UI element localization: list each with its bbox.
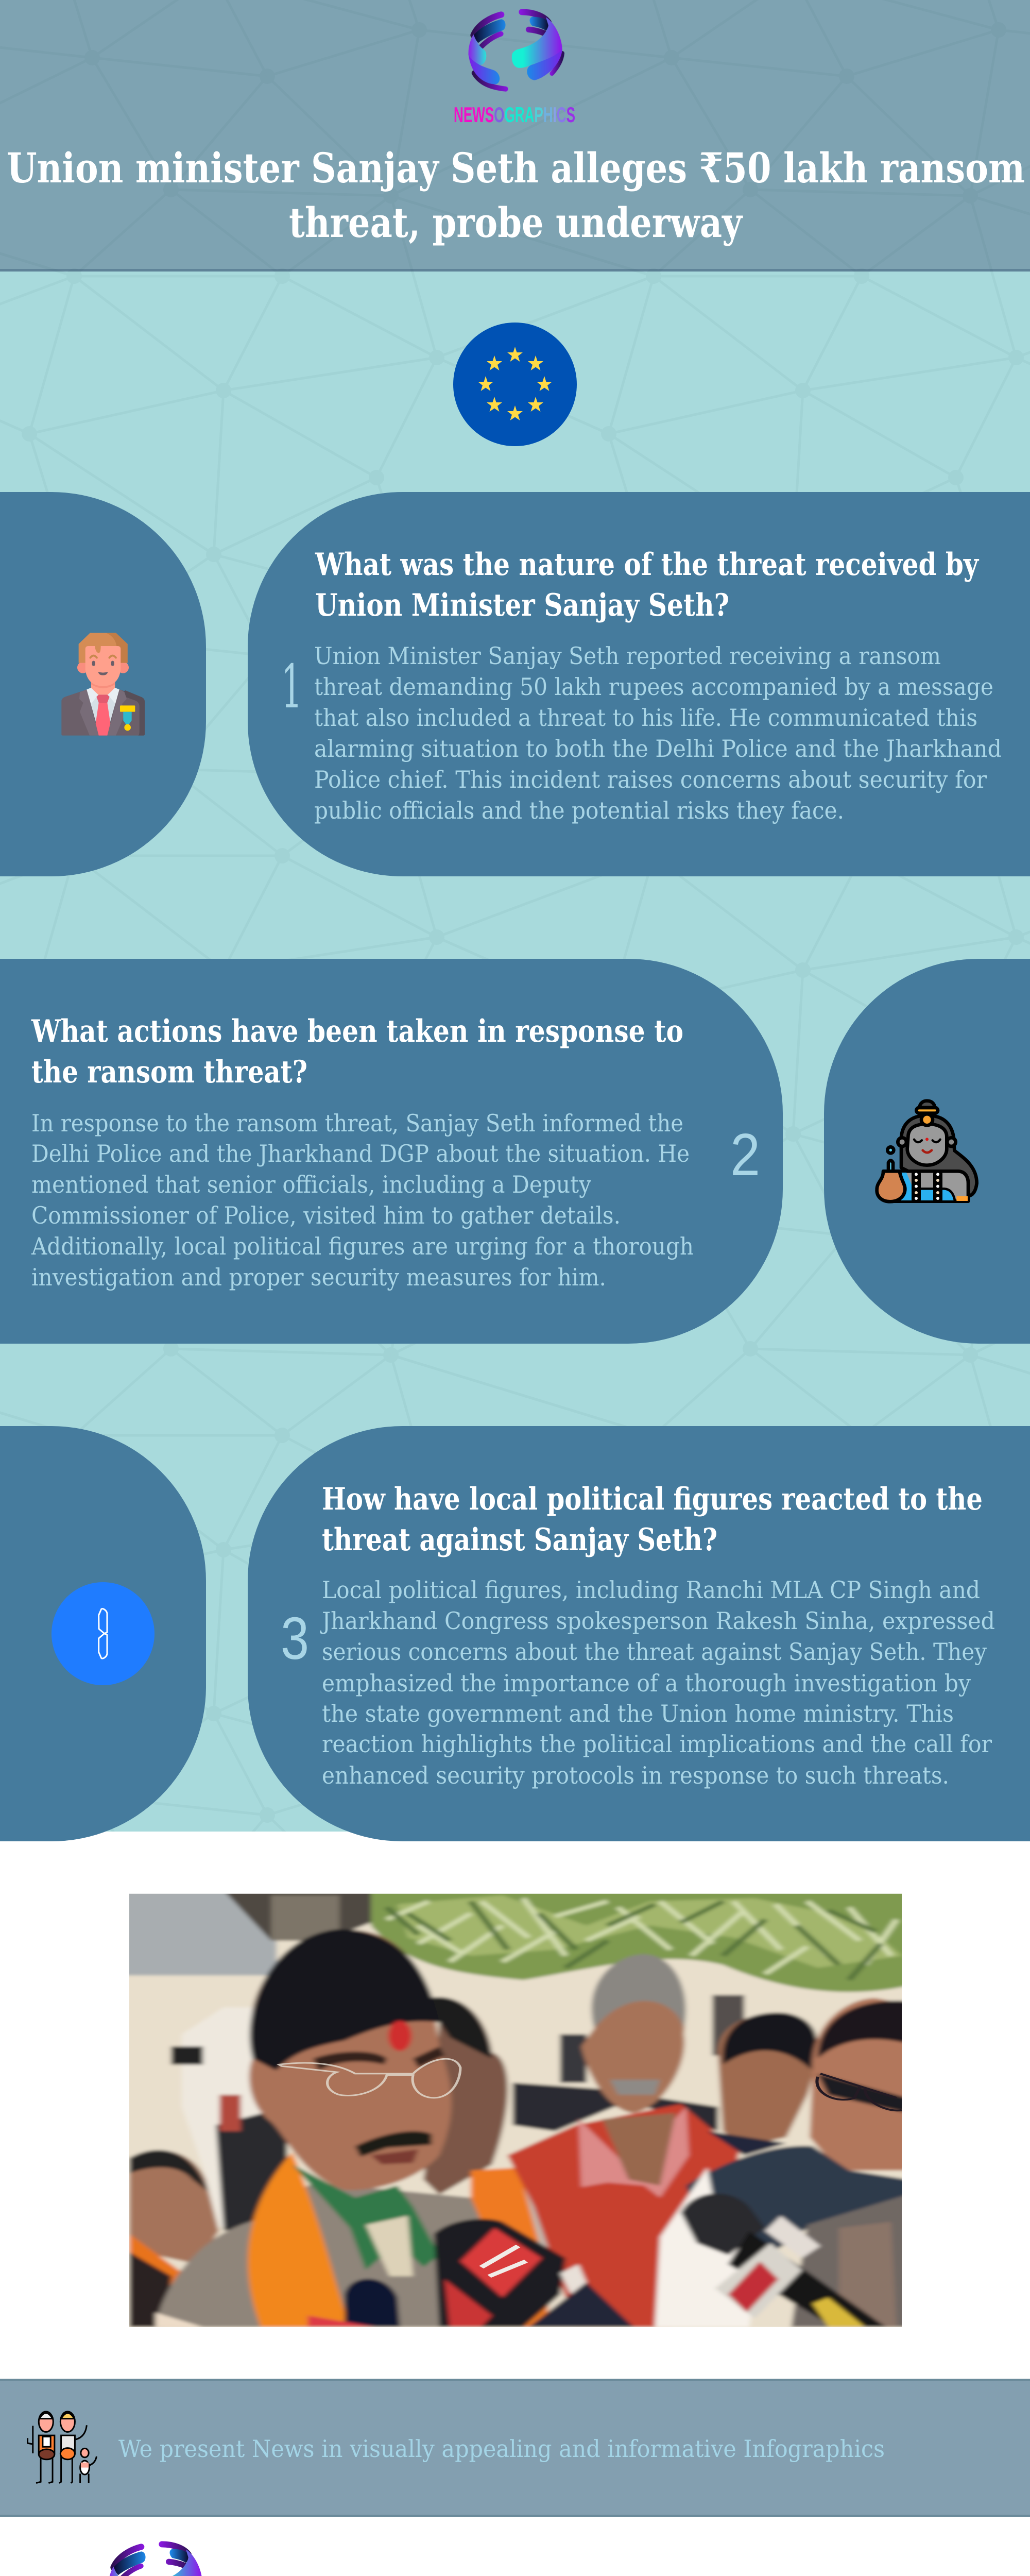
panel 3 heading: threat against Sanjay Seth? [322, 1522, 717, 1558]
panel 2 body text: mentioned that senior officials, including a Deputy [31, 1171, 591, 1198]
header band [0, 0, 1030, 271]
panel 3: content panel [248, 1426, 1030, 1841]
icon: minister with medal [61, 633, 145, 736]
icon: family group [28, 2412, 96, 2483]
panel 3 body text: Local political figures, including Ranchi MLA CP Singh and [322, 1576, 980, 1604]
panel 1 body text: that also included a threat to his life. He communicated this [314, 704, 977, 732]
footer logo mark [108, 2544, 202, 2576]
panel 1 number: 1 [281, 652, 302, 722]
panel 1 body text [314, 642, 1002, 824]
footer band [0, 2379, 1030, 2517]
panel 2: icon panel [824, 959, 1030, 1344]
title [7, 144, 1025, 247]
panel 1: content panel [248, 492, 1030, 876]
panel 3 body text: emphasized the importance of a thorough investigation by [322, 1669, 971, 1697]
header logo wordmark: NEWSOGRAPHICS [454, 103, 575, 127]
panel 1 body text: Police chief. This incident raises concerns about security for [314, 766, 987, 793]
panel 3 heading [322, 1481, 983, 1558]
panel 3 body text: serious concerns about the threat against Sanjay Seth. They [322, 1638, 987, 1666]
icon: goddess with pot [877, 1101, 977, 1201]
panel 3 body text: enhanced security protocols in response to such threats. [322, 1761, 949, 1789]
panel 2 body text: Additionally, local political figures are urging for a thorough [31, 1232, 694, 1260]
panel 3 body text: Jharkhand Congress spokesperson Rakesh Sinha, expressed [320, 1607, 995, 1635]
footer band tagline: We present News in visually appealing and informative Infographics [118, 2435, 885, 2463]
header logo mark [468, 12, 562, 89]
background: teal network pattern [0, 0, 1030, 1832]
panel 1 heading: Union Minister Sanjay Seth? [315, 587, 729, 623]
panel 2 number: 2 [730, 1121, 760, 1188]
icon: EU flag circle [453, 323, 577, 446]
panel 2 heading: What actions have been taken in response to [31, 1013, 683, 1049]
panel 3 body text [320, 1576, 995, 1789]
panel 1 heading [315, 547, 980, 623]
panel 2 heading: the ransom threat? [31, 1054, 307, 1090]
panel 1 body text: public officials and the potential risks they face. [314, 796, 844, 824]
panel 2 body text: Delhi Police and the Jharkhand DGP about the situation. He [31, 1140, 690, 1167]
panel 2 body text: Commissioner of Police, visited him to gather details. [31, 1201, 621, 1229]
panel 3 number: 3 [281, 1605, 309, 1672]
panel 2: content panel [0, 959, 783, 1344]
panel 1 body text: Union Minister Sanjay Seth reported receiving a ransom [314, 642, 941, 670]
icon: blue circle with eight [52, 1582, 154, 1685]
photo: politician speaking to press microphones [124, 1891, 907, 2329]
panel 1 body text: threat demanding 50 lakh rupees accompanied by a message [314, 673, 993, 701]
panel 2 body text: In response to the ransom threat, Sanjay Seth informed the [31, 1109, 683, 1137]
panel 2 body text: investigation and proper security measures for him. [31, 1263, 606, 1291]
panel 2 body text [31, 1109, 694, 1291]
title: threat, probe underway [289, 198, 743, 247]
panel 3: icon panel [0, 1426, 206, 1841]
panel 2 heading [31, 1013, 683, 1090]
panel 3 body text: the state government and the Union home ministry. This [322, 1700, 954, 1727]
panel 1: icon panel [0, 492, 206, 876]
panel 3 body text: reaction highlights the political implications and the call for [322, 1730, 992, 1758]
